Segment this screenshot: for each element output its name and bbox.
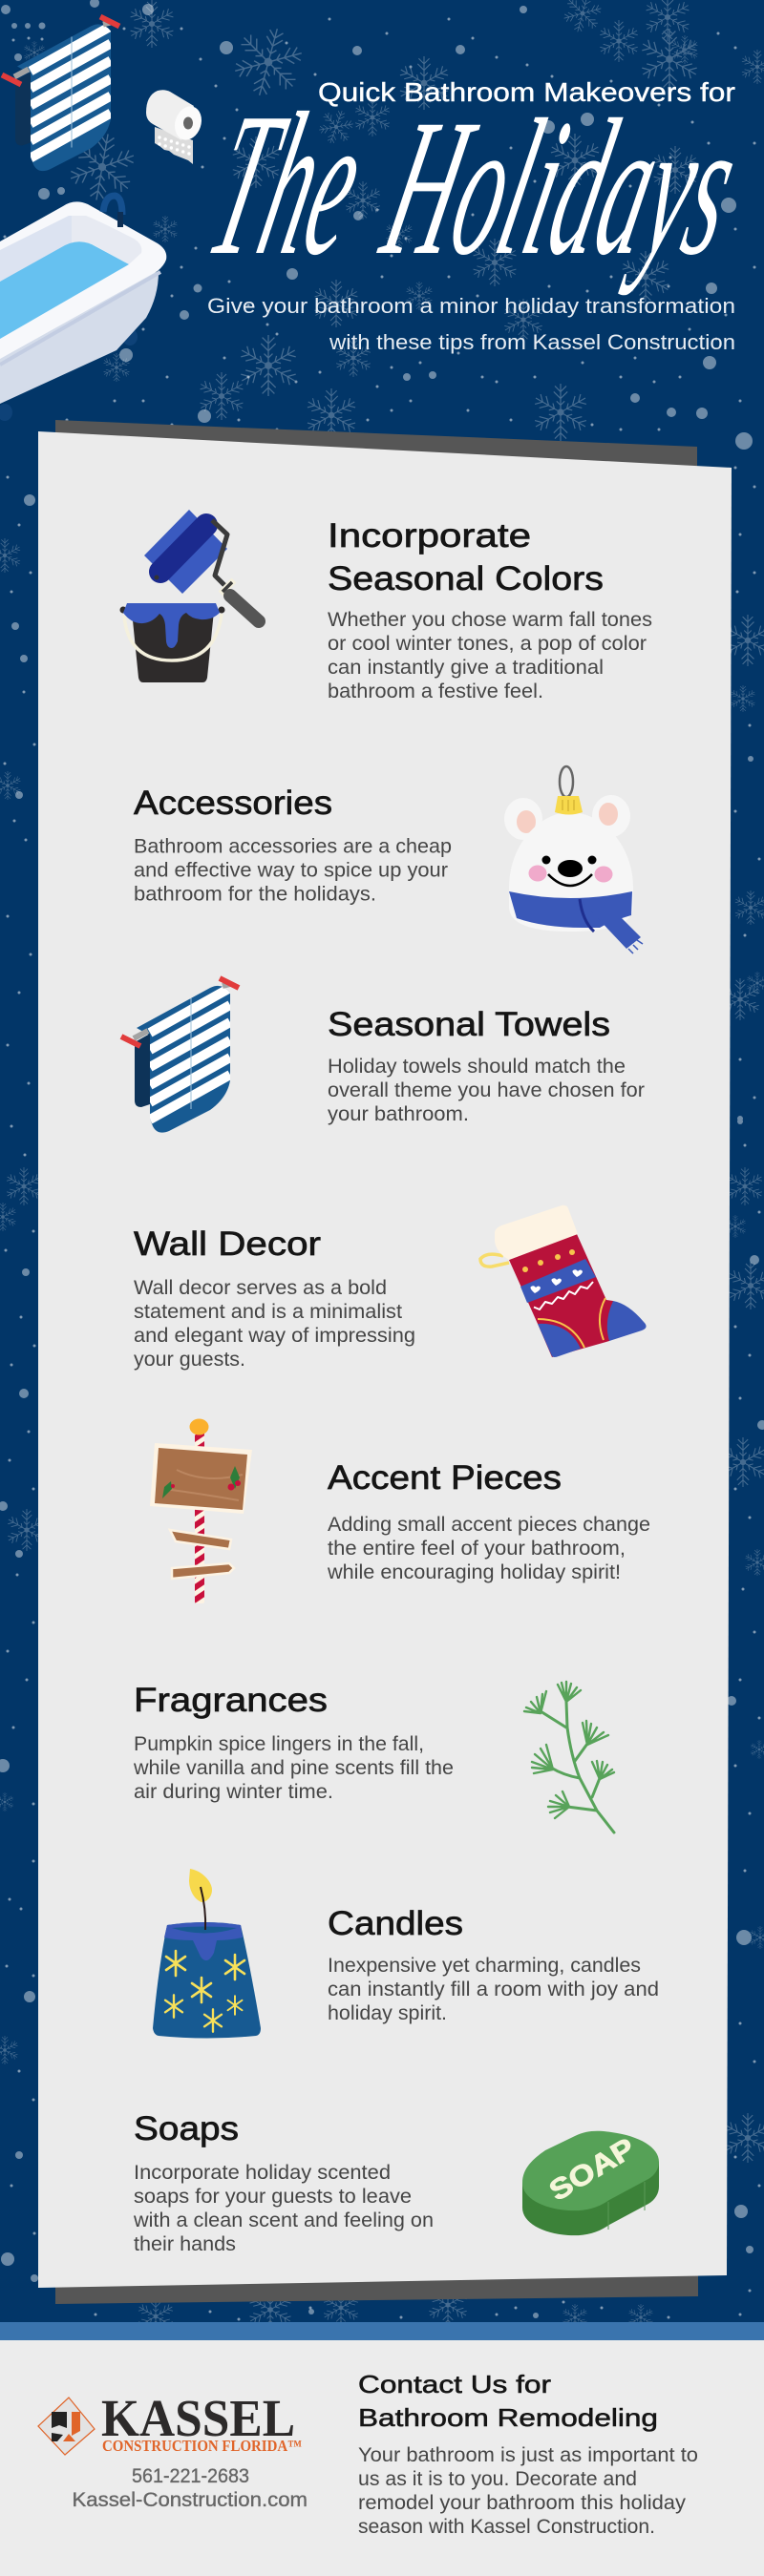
body text: Pumpkin spice lingers in the fall,: [134, 1733, 424, 1755]
contact details: 561-221-2683: [132, 2465, 249, 2487]
contact details: [73, 2465, 308, 2511]
body text: can instantly fill a room with joy and: [328, 1979, 659, 2000]
subtitle: quick bathroom makeovers: Quick Bathroom Makeovers for: [318, 77, 735, 107]
body text: Wall decor serves as a bold: [134, 1277, 387, 1299]
body text: [134, 836, 452, 905]
icon: towel: [121, 978, 239, 1133]
intro text: [207, 294, 735, 354]
tip: candles: [153, 1869, 659, 2039]
heading: Seasonal Towels: [328, 1006, 610, 1043]
logo: kassel construction: [38, 2389, 302, 2455]
body text: bathroom a festive feel.: [328, 681, 543, 702]
contact heading: [358, 2370, 658, 2432]
contact body text: us as it is to you. Decorate and: [358, 2468, 637, 2490]
icon: christmas stocking: [480, 1205, 647, 1357]
heading: Incorporate: [328, 517, 531, 555]
icon: bar of soap: SOAP: [544, 2132, 641, 2208]
tip: seasonal colors: [120, 510, 652, 702]
illustration: bathtub: [0, 196, 166, 421]
tip: soaps: [133, 2110, 659, 2255]
body text: your bathroom.: [328, 1103, 469, 1125]
intro text: with these tips from Kassel Construction: [329, 330, 735, 354]
body text: your guests.: [134, 1349, 245, 1371]
contact body text: season with Kassel Construction.: [358, 2516, 655, 2538]
body text: Adding small accent pieces change: [328, 1514, 650, 1536]
icon: pine sprig: [524, 1682, 614, 1833]
heading: [328, 517, 604, 597]
heading: Wall Decor: [134, 1225, 321, 1263]
icon: holiday signpost: [150, 1418, 252, 1603]
contact body text: [358, 2444, 698, 2538]
logo: kassel construction: CONSTRUCTION FLORIDA™: [102, 2437, 302, 2455]
body text: the entire feel of your bathroom,: [328, 1538, 626, 1560]
body text: statement and is a minimalist: [134, 1301, 402, 1323]
contact body text: remodel your bathroom this holiday: [358, 2492, 687, 2514]
tip: seasonal towels: [121, 978, 645, 1133]
illustration: toilet paper roll: [146, 90, 205, 164]
contact heading: Contact Us for: [358, 2370, 551, 2398]
body text: [134, 1277, 415, 1371]
body text: bathroom for the holidays.: [134, 884, 376, 905]
icon: paint roller and bucket: [120, 510, 259, 682]
tip: wall decor: [134, 1205, 647, 1371]
body text: or cool winter tones, a pop of color: [328, 633, 647, 655]
body text: Bathroom accessories are a cheap: [134, 836, 452, 857]
heading: Fragrances: [134, 1682, 328, 1719]
body text: can instantly give a traditional: [328, 657, 604, 679]
heading: Accessories: [134, 785, 332, 822]
logo: kassel construction: KASSEL: [101, 2389, 295, 2447]
icon: candle with stars: [153, 1869, 261, 2039]
contact heading: Bathroom Remodeling: [358, 2403, 658, 2432]
body text: Holiday towels should match the: [328, 1056, 626, 1078]
body text: and elegant way of impressing: [134, 1325, 415, 1347]
heading: Soaps: [134, 2110, 239, 2147]
body text: [328, 1056, 645, 1125]
illustration: striped towel on rail: [2, 17, 119, 171]
body text: soaps for your guests to leave: [134, 2186, 412, 2208]
body text: [328, 1955, 659, 2024]
body text: [133, 2162, 434, 2255]
body text: Incorporate holiday scented: [134, 2162, 391, 2184]
icon: bar of soap: [522, 2131, 659, 2235]
body text: Whether you chose warm fall tones: [328, 609, 652, 631]
heading: Candles: [328, 1905, 463, 1942]
body text: and effective way to spice up your: [134, 859, 448, 882]
footer: [0, 2340, 764, 2576]
heading: Seasonal Colors: [328, 560, 604, 597]
tip: accent pieces: [150, 1418, 650, 1603]
tip: accessories: [134, 766, 643, 953]
body text: [327, 1514, 650, 1583]
tip: fragrances: [133, 1682, 614, 1833]
body text: overall theme you have chosen for: [328, 1079, 645, 1101]
body text: [328, 609, 652, 702]
title: the holidays: The: [191, 71, 384, 298]
main panel: [38, 431, 732, 2288]
contact body text: Your bathroom is just as important to: [358, 2444, 698, 2466]
footer stripe: [0, 2322, 764, 2340]
panel shadow: [55, 420, 698, 2304]
body text: while encouraging holiday spirit!: [327, 1561, 621, 1583]
heading: Accent Pieces: [328, 1459, 562, 1497]
intro text: Give your bathroom a minor holiday transformation: [207, 294, 735, 318]
body text: while vanilla and pine scents fill the: [133, 1757, 454, 1779]
body text: Inexpensive yet charming, candles: [328, 1955, 641, 1977]
icon: polar bear ornament: [504, 766, 643, 953]
body text: air during winter time.: [134, 1781, 333, 1803]
body text: holiday spirit.: [328, 2002, 447, 2024]
title: the holidays: [191, 71, 756, 298]
body text: [133, 1733, 454, 1803]
body text: with a clean scent and feeling on: [133, 2209, 434, 2231]
body text: their hands: [134, 2233, 236, 2255]
contact details: Kassel-Construction.com: [73, 2489, 308, 2511]
